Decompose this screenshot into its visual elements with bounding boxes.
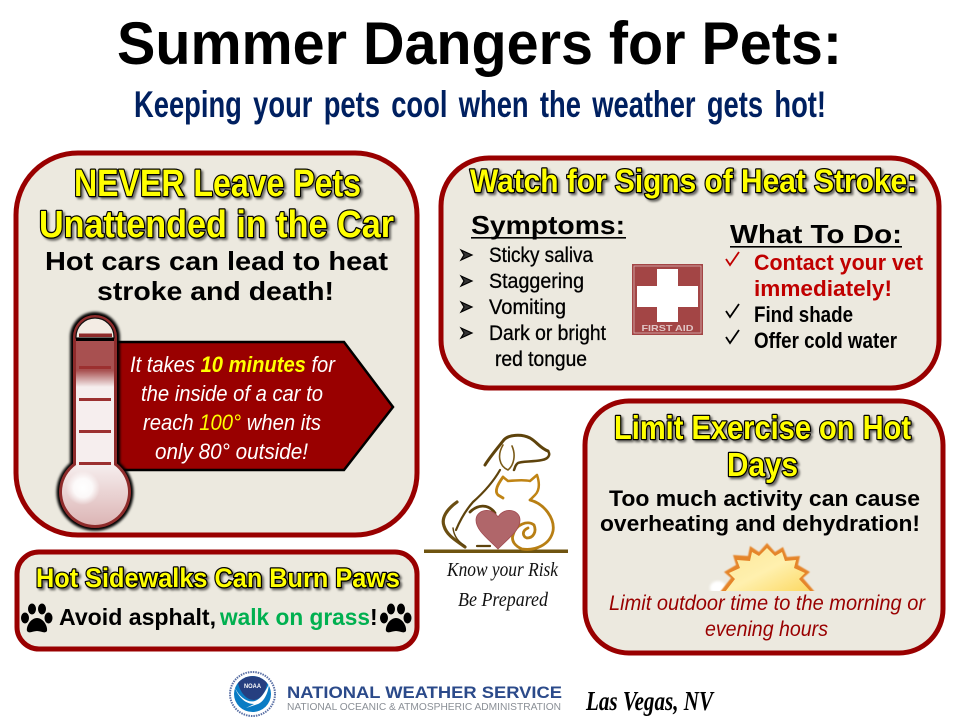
arrow callout: 10 minutes: reach 100° when its [143, 410, 321, 435]
text: national weather service: NATIONAL WEATHER SERVICE [287, 683, 562, 702]
text: avoid asphalt [59, 604, 378, 630]
panel: limit exercise [585, 401, 943, 653]
text: limit outdoor time [609, 592, 926, 641]
text: hot cars warning: stroke and death! [97, 276, 334, 306]
heading: limit exercise: Limit Exercise on Hot [614, 409, 911, 446]
icon: right paw [380, 604, 412, 632]
logo: dog and cat with heart [424, 435, 568, 553]
icon: sun [710, 543, 815, 595]
heading: never leave pets: Unattended in the Car [39, 204, 394, 246]
text: national weather service [287, 683, 562, 713]
text: avoid asphalt: walk on grass [219, 604, 370, 630]
what to do list: Offer cold water [754, 328, 897, 353]
heading: never leave pets: NEVER Leave Pets [74, 163, 361, 205]
symptoms list: Symptoms: [471, 210, 625, 240]
text: hot cars warning [45, 246, 388, 306]
what to do list: What To Do: [730, 219, 902, 249]
text: overheating warning [600, 486, 920, 536]
arrow callout: 10 minutes: only 80° outside! [155, 439, 308, 464]
icon: heart [476, 510, 520, 549]
what to do list: Contact your vet [754, 250, 924, 275]
panel: never leave pets in the car [16, 153, 417, 535]
what to do list [726, 219, 924, 353]
text: las vegas: Las Vegas, NV [585, 686, 715, 716]
heading: limit exercise [614, 409, 911, 483]
symptoms list: Dark or bright [489, 322, 606, 345]
logo: NOAA [230, 672, 275, 716]
text: overheating warning: overheating and dehydration! [600, 511, 920, 536]
text: know your risk, be prepared [446, 559, 559, 611]
symptoms list [461, 210, 626, 371]
arrow callout: 10 minutes [112, 342, 393, 470]
icon: left paw [21, 604, 52, 632]
heading: hot sidewalks: Hot Sidewalks Can Burn Paws [36, 563, 400, 593]
heading: never leave pets [39, 163, 394, 246]
text: limit outdoor time: evening hours [705, 618, 828, 641]
text: limit outdoor time: Limit outdoor time to the morning or [609, 592, 926, 615]
heading: limit exercise: Days [727, 446, 798, 483]
what to do list: Find shade [754, 302, 853, 327]
what to do list: immediately! [754, 276, 892, 301]
heading: watch for signs: Watch for Signs of Heat Stroke: [470, 163, 917, 199]
icon: thermometer [56, 312, 133, 531]
panel: hot sidewalks [17, 552, 417, 649]
text: know your risk, be prepared: Be Prepared [458, 589, 549, 611]
arrow callout: 10 minutes: It takes 10 minutes for [130, 352, 337, 377]
icon: first aid: FIRST AID [642, 323, 694, 333]
title: Summer Dangers for Pets: [117, 10, 842, 77]
text: national weather service: NATIONAL OCEANIC & ATMOSPHERIC ADMINISTRATION [287, 701, 561, 713]
logo: NOAA: NOAA [244, 684, 262, 690]
text: overheating warning: Too much activity can cause [609, 486, 920, 511]
arrow callout: 10 minutes: the inside of a car to [141, 381, 323, 406]
symptoms list: Staggering [489, 270, 584, 293]
symptoms list: Sticky saliva [489, 244, 593, 267]
text: avoid asphalt: Avoid asphalt, [59, 604, 216, 630]
symptoms list: Vomiting [489, 296, 566, 319]
icon: first aid [632, 264, 703, 335]
text: avoid asphalt: ! [370, 604, 378, 630]
text: know your risk, be prepared: Know your Risk [446, 559, 559, 581]
panel: signs of heat stroke [441, 158, 939, 388]
symptoms list: red tongue [495, 348, 587, 371]
text: hot cars warning: Hot cars can lead to heat [45, 246, 388, 276]
